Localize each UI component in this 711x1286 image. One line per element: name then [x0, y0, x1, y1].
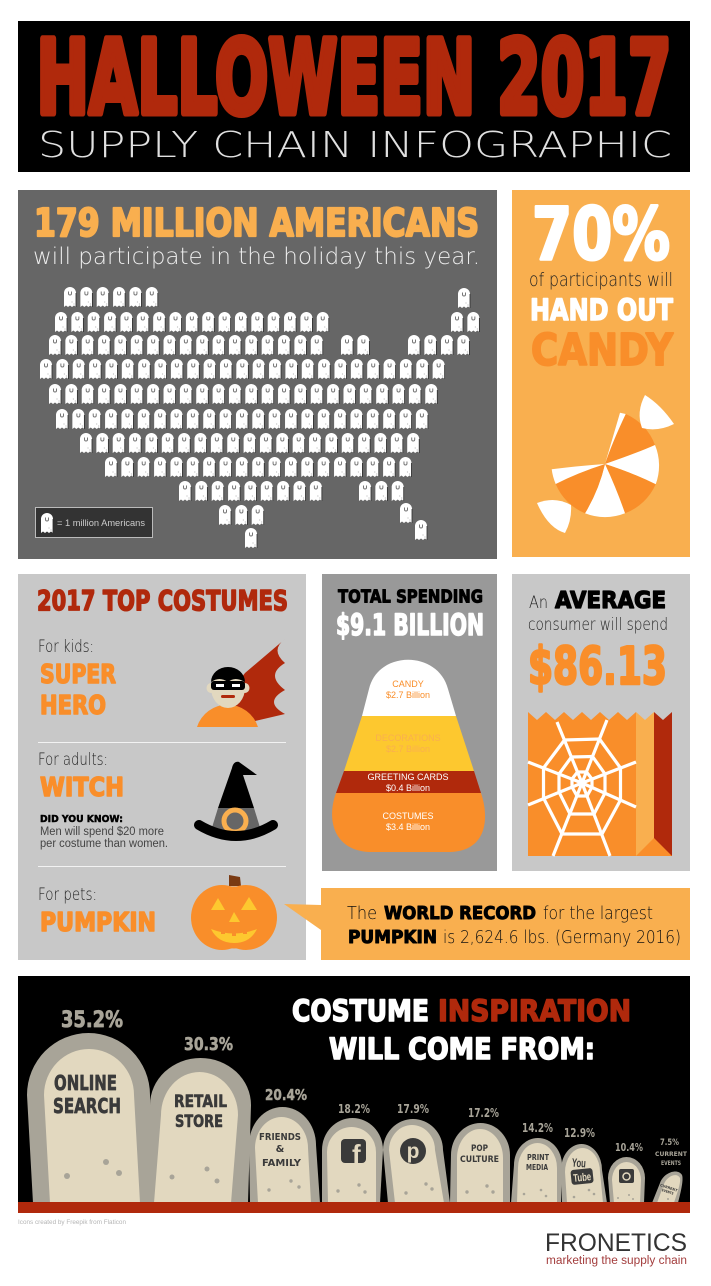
subtitle: SUPPLY CHAIN INFOGRAPHIC	[38, 125, 672, 166]
tombstone: online search 35.2%	[27, 1008, 152, 1203]
costume: super hero: SUPER	[40, 660, 116, 690]
tombstone: friends and family 20.4%: &	[276, 1144, 285, 1155]
callout: world record pumpkin	[284, 888, 690, 960]
text: an: An	[529, 593, 548, 613]
segment: candy: CANDY	[392, 679, 424, 689]
segment: decorations: $2.7 Billion	[386, 744, 430, 754]
tombstone: current events 7.5%	[652, 1138, 688, 1203]
segment: costumes: COSTUMES	[382, 811, 434, 821]
ground band	[18, 1202, 690, 1213]
heading: costume inspiration: COSTUME	[292, 994, 429, 1028]
segment: greeting cards	[336, 771, 481, 793]
tombstone: pinterest 17.9%: p	[407, 1140, 419, 1163]
tombstone: current events 7.5%: 7.5%	[660, 1138, 679, 1148]
tombstone: youtube 12.9%	[561, 1126, 607, 1203]
tombstone: print media 14.2%: MEDIA	[526, 1163, 548, 1172]
divider	[38, 742, 286, 743]
segment: greeting cards: $0.4 Billion	[386, 783, 430, 793]
costume: super hero: HERO	[40, 691, 106, 721]
icon: wrapped candy	[537, 395, 674, 533]
tombstone: current events 7.5%: EVENTS	[661, 1159, 681, 1167]
did you know note	[40, 814, 168, 850]
callout text line 1: for the largest	[543, 903, 653, 924]
costume: pumpkin: PUMPKIN	[40, 908, 156, 938]
legend: = 1 million Americans	[57, 518, 145, 529]
panel: 179 million Americans	[18, 190, 497, 559]
did you know note: DID YOU KNOW:	[40, 814, 123, 825]
tombstone: youtube 12.9%: Tube	[573, 1171, 592, 1185]
tombstone: youtube 12.9%: You	[571, 1156, 586, 1170]
stat: $9.1 billion: $9.1 BILLION	[336, 608, 484, 642]
tombstone: retail store 30.3%: RETAIL	[174, 1092, 227, 1112]
callout text line 2	[348, 927, 681, 948]
tombstone: retail store 30.3%: STORE	[175, 1112, 223, 1132]
tombstone: retail store 30.3%	[150, 1034, 251, 1203]
heading: costume inspiration: INSPIRATION	[438, 994, 631, 1028]
callout text line 1	[347, 903, 653, 924]
tombstone: online search 35.2%: ONLINE	[54, 1071, 117, 1095]
panel: 70% hand out candy	[512, 190, 690, 557]
stat: 70%: 70%	[532, 192, 670, 276]
tombstone: print media 14.2%: 14.2%	[522, 1121, 553, 1135]
text: consumer will spend: consumer will spend	[528, 615, 668, 635]
tombstone: pop culture 17.2%: CULTURE	[460, 1155, 499, 1165]
segment: decorations	[344, 716, 474, 771]
segment: greeting cards: GREETING CARDS	[367, 772, 449, 782]
icon: witch hat	[199, 762, 273, 836]
panel: costume inspiration	[18, 976, 690, 1203]
panel: total spending	[322, 574, 497, 871]
tombstone: print media 14.2%	[511, 1121, 562, 1203]
text: hand out: HAND OUT	[530, 293, 673, 327]
icon: pumpkin	[191, 875, 277, 950]
tombstone: facebook 18.2%	[322, 1102, 383, 1203]
costume: witch: WITCH	[40, 773, 124, 803]
tombstone: retail store 30.3%: 30.3%	[184, 1034, 233, 1055]
logo: Fronetics: FRONETICS	[545, 1229, 687, 1257]
tombstone: youtube 12.9%: 12.9%	[564, 1126, 595, 1140]
heading: 2017 top costumes: 2017 TOP COSTUMES	[37, 584, 288, 617]
tombstone: pop culture 17.2%: 17.2%	[468, 1106, 499, 1120]
tombstone: instagram 10.4%: 10.4%	[615, 1141, 643, 1154]
icon: super hero	[197, 639, 285, 727]
tombstone: facebook 18.2%: 18.2%	[338, 1102, 370, 1116]
heading: costume inspiration: WILL COME FROM:	[329, 1032, 595, 1066]
candy corn chart	[332, 660, 485, 852]
title panel	[18, 19, 690, 172]
tombstone: facebook 18.2%: f	[352, 1139, 361, 1169]
callout text line 2: PUMPKIN	[348, 927, 437, 948]
heading: total spending: TOTAL SPENDING	[338, 586, 483, 608]
text: average: AVERAGE	[555, 588, 666, 614]
tombstone: friends and family 20.4%: FAMILY	[262, 1158, 302, 1169]
label: for pets: For pets:	[38, 885, 97, 905]
tombstone: current events 7.5%: EVENTS	[661, 1188, 674, 1196]
tombstone: current events 7.5%: CURRENT	[660, 1183, 678, 1193]
tombstone: online search 35.2%: SEARCH	[53, 1094, 121, 1118]
tombstone: friends and family 20.4%: FRIENDS	[259, 1132, 301, 1143]
tombstone: friends and family 20.4%: 20.4%	[265, 1086, 307, 1104]
segment: costumes	[332, 793, 485, 852]
tombstone: instagram 10.4%	[608, 1141, 645, 1203]
tombstone: pinterest 17.9%	[383, 1102, 450, 1203]
text: of participants will: of participants will	[529, 269, 673, 291]
text: candy: CANDY	[531, 325, 674, 376]
segment: decorations: DECORATIONS	[375, 733, 441, 743]
ghost map of the United States	[40, 287, 479, 548]
label: for kids: For kids:	[38, 637, 94, 657]
did you know note: per costume than women.	[40, 838, 168, 850]
segment: candy	[362, 660, 456, 716]
icon credit: Icons created by Freepik from Flaticon	[18, 1219, 126, 1226]
divider	[38, 866, 286, 867]
callout text line 1: The	[347, 903, 377, 924]
tombstone: pop culture 17.2%	[450, 1106, 510, 1203]
callout pointer	[284, 904, 321, 930]
logo: Fronetics: marketing the supply chain	[546, 1255, 687, 1267]
did you know note: Men will spend $20 more	[40, 826, 164, 838]
tombstone: pinterest 17.9%: 17.9%	[397, 1102, 429, 1116]
tombstone: print media 14.2%: PRINT	[527, 1153, 550, 1162]
panel: 2017 top costumes	[18, 574, 306, 960]
tombstone: current events 7.5%: CURRENT	[655, 1150, 688, 1158]
costume: super hero	[40, 660, 116, 721]
subheading: will participate in the holiday this year.	[33, 244, 480, 270]
tombstone: pop culture 17.2%: POP	[471, 1144, 488, 1154]
icon: paper bag with spider web	[528, 712, 672, 856]
tombstone: friends and family 20.4%	[249, 1086, 320, 1203]
label: for adults: For adults:	[38, 750, 108, 770]
heading: costume inspiration	[292, 994, 631, 1066]
segment: candy: $2.7 Billion	[386, 690, 430, 700]
tombstone: online search 35.2%: 35.2%	[61, 1008, 123, 1033]
segment: costumes: $3.4 Billion	[386, 822, 430, 832]
heading: 179 million Americans: 179 MILLION AMERICANS	[34, 201, 479, 245]
panel: average consumer spend	[512, 574, 690, 871]
legend	[36, 508, 152, 538]
callout text line 1: WORLD RECORD	[384, 903, 536, 924]
